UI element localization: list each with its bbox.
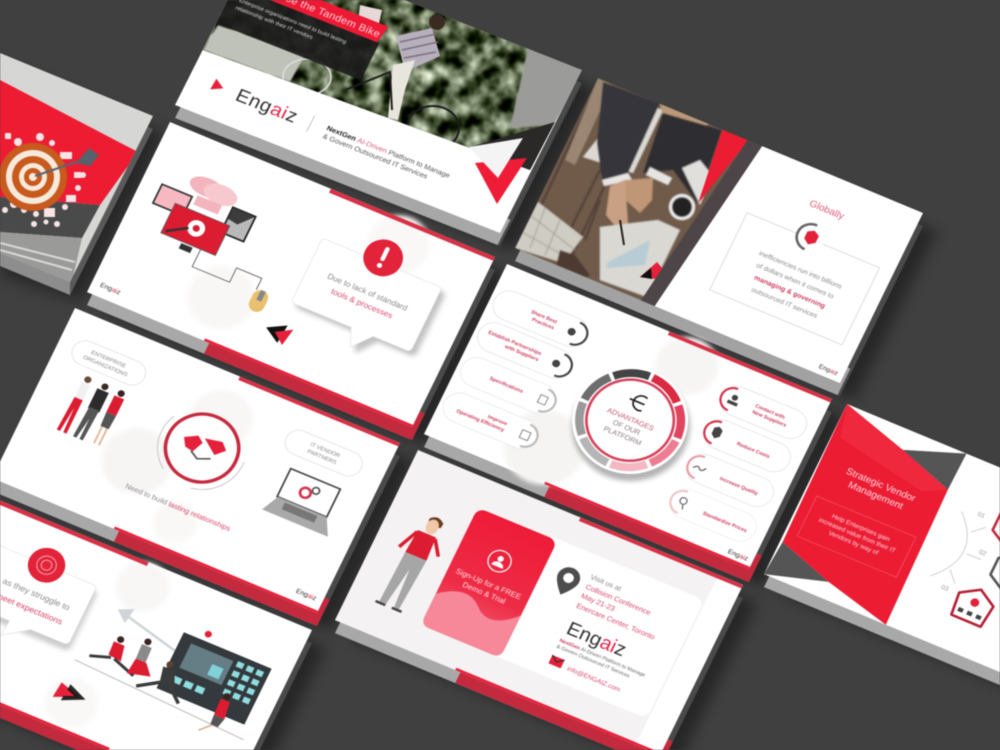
radial diagram: ADVANTAGES [606, 406, 656, 433]
icon: laptop with gears [262, 466, 349, 537]
pill: increase quality: Increase Quality [719, 476, 759, 497]
pill: it vendor partners [281, 426, 367, 480]
sign-up card [421, 508, 557, 658]
dark and red diagonal bars [688, 130, 748, 210]
pill: contact with new suppliers: New Suppliers [751, 409, 787, 429]
slide: globally [510, 70, 937, 401]
red and gray panel: increased value from their IT [817, 517, 897, 555]
tagline: NextGen AI-Driven Platform to Manage [558, 638, 646, 679]
photo caption block: relationship with their IT vendors [234, 5, 314, 41]
icon: red play triangle [210, 78, 226, 93]
pill: it vendor partners: PARTNERS [306, 449, 337, 466]
logo: Engaiz [99, 282, 122, 297]
slide: globally: of dollars when it comes to [755, 262, 835, 300]
icon: dollar shield ring [792, 220, 829, 255]
pill: share best practices: Share Best [530, 309, 558, 325]
numbered hexagon 01: 01 [976, 511, 986, 520]
event details [575, 572, 671, 641]
pill: establish partnerships: with Suppliers [503, 344, 540, 363]
icon: arrow logo [262, 318, 294, 346]
logo: Engaiz [232, 85, 302, 128]
numbered hexagon 01 [969, 496, 1000, 553]
illustration: devices and cloud [139, 163, 263, 270]
radial diagram: OF OUR [611, 418, 642, 437]
icon: handshake in ring [143, 393, 261, 503]
event details: Visit us at [589, 572, 623, 593]
photo: cyclists on tandem bike [202, 0, 582, 171]
sign-up card: Demo & Trial [461, 580, 507, 606]
radial diagram: PLATFORM [602, 424, 643, 447]
pill: reduce costs: Reduce Costs [736, 441, 771, 460]
pill: establish partnerships: Establish Partnerships [487, 330, 542, 357]
red and gray panel: Strategic Vendor [844, 466, 918, 505]
icon: mail [548, 655, 565, 668]
illustration: control panel [157, 622, 276, 725]
red and gray panel: Vendors by way of [827, 530, 880, 557]
heading: Globally [807, 198, 846, 222]
pill: improve operating efficiency: Improve [487, 414, 508, 427]
photo: businessman at desk [514, 78, 740, 301]
pill: standardize prices: Standardize Prices [702, 511, 748, 534]
slide: lack of tools [87, 118, 509, 445]
slide: strategic vendor management [764, 404, 1000, 727]
pill: contact with new suppliers [715, 381, 812, 443]
numbered hexagon 02 [967, 541, 1000, 597]
event details: Collision Conference [584, 582, 652, 617]
logo: Engaiz [295, 588, 318, 603]
pill: share best practices [488, 286, 593, 351]
slide: advantages of platform [422, 260, 846, 587]
red and gray panel: Help Enterprises gain [830, 513, 891, 543]
pill: improve operating efficiency: Operating Efficiency [455, 408, 505, 433]
caption: Need to build lasting relationships [124, 482, 232, 533]
slide: sign up [335, 450, 757, 750]
red and gray panel: Management [846, 480, 905, 512]
white info panel [491, 535, 704, 719]
pill: it vendor partners: IT VENDOR [309, 442, 341, 459]
numbered hexagon 02: 02 [977, 549, 988, 558]
slide: target icon cover [0, 40, 165, 302]
pill: contact with new suppliers: Contact with [754, 403, 786, 421]
pill: share best practices: Practices [531, 317, 555, 331]
numbered hexagon 03 [932, 576, 998, 628]
sign-up card: Sign-Up for a FREE [454, 567, 523, 601]
icon: mouse [246, 288, 271, 314]
icon: user circle [484, 547, 515, 575]
pill: enterprise organizations [67, 337, 150, 389]
slide: tandem bike cover [175, 0, 596, 251]
callout bubble: Due to lack of standard [326, 272, 409, 313]
icon: alert [356, 233, 410, 283]
illustration: presenter man [373, 509, 454, 616]
callout bubble: tools & processes [330, 287, 394, 320]
pill: improve operating efficiency [438, 388, 543, 454]
pill: enterprise organizations: ORGANIZATIONS [82, 355, 128, 379]
icon: location pin [550, 564, 584, 599]
event details: May 21-23 [580, 591, 616, 613]
email: info@ENGAIZ.com [566, 666, 622, 694]
icon: red target circle [22, 542, 71, 588]
pill: establish partnerships [472, 318, 577, 383]
connector arc [930, 512, 997, 591]
wire to mouse [192, 249, 263, 293]
photo caption block: & Govern Outsourced IT Services [321, 132, 430, 181]
slide: sign up: & Govern Outsourced IT Services [555, 644, 631, 680]
event details: Enercare Center, Toronto [575, 601, 657, 641]
slide: lasting relationships [0, 308, 414, 631]
white text panel [655, 136, 923, 383]
pill: specifications [455, 353, 561, 418]
icon: arrow logo [53, 680, 89, 709]
illustration: running people [78, 621, 244, 737]
logo: Engaiz [817, 363, 839, 377]
tagline: NextGen AI-Driven Platform to Manage [325, 124, 452, 180]
icon: target with arrow [0, 143, 99, 211]
slide: globally: outsourced IT services [750, 287, 819, 320]
photo caption block [185, 0, 502, 188]
pill: standardize prices [665, 484, 762, 546]
icon: E mark [627, 392, 648, 412]
pill: reduce costs [699, 415, 796, 477]
callout bubble: as they struggle to [1, 576, 72, 612]
radial diagram [551, 349, 711, 499]
red and gray panel [764, 404, 969, 625]
numbered hexagon 03: 03 [940, 584, 950, 593]
logo: Engaiz [726, 548, 750, 563]
pill: enterprise organizations: ENTERPRISE [90, 350, 127, 370]
callout bubble [0, 538, 100, 662]
big gray arrow [110, 603, 187, 652]
illustration: three people [57, 374, 128, 448]
logo: Engaiz [563, 618, 630, 661]
top red strip [329, 189, 495, 261]
icon cloud: small business icons [2, 133, 86, 227]
pill: specifications: Specifications [488, 376, 524, 395]
pill: increase quality [682, 449, 779, 511]
text box [710, 213, 880, 345]
slide: globally: managing & governing [753, 275, 826, 310]
body text: inefficiencies run into billions [758, 250, 843, 291]
callout bubble [281, 216, 458, 375]
floor line [71, 660, 248, 740]
icon: white and red triangles [469, 138, 527, 204]
slide: struggle to meet expectations [0, 495, 326, 750]
